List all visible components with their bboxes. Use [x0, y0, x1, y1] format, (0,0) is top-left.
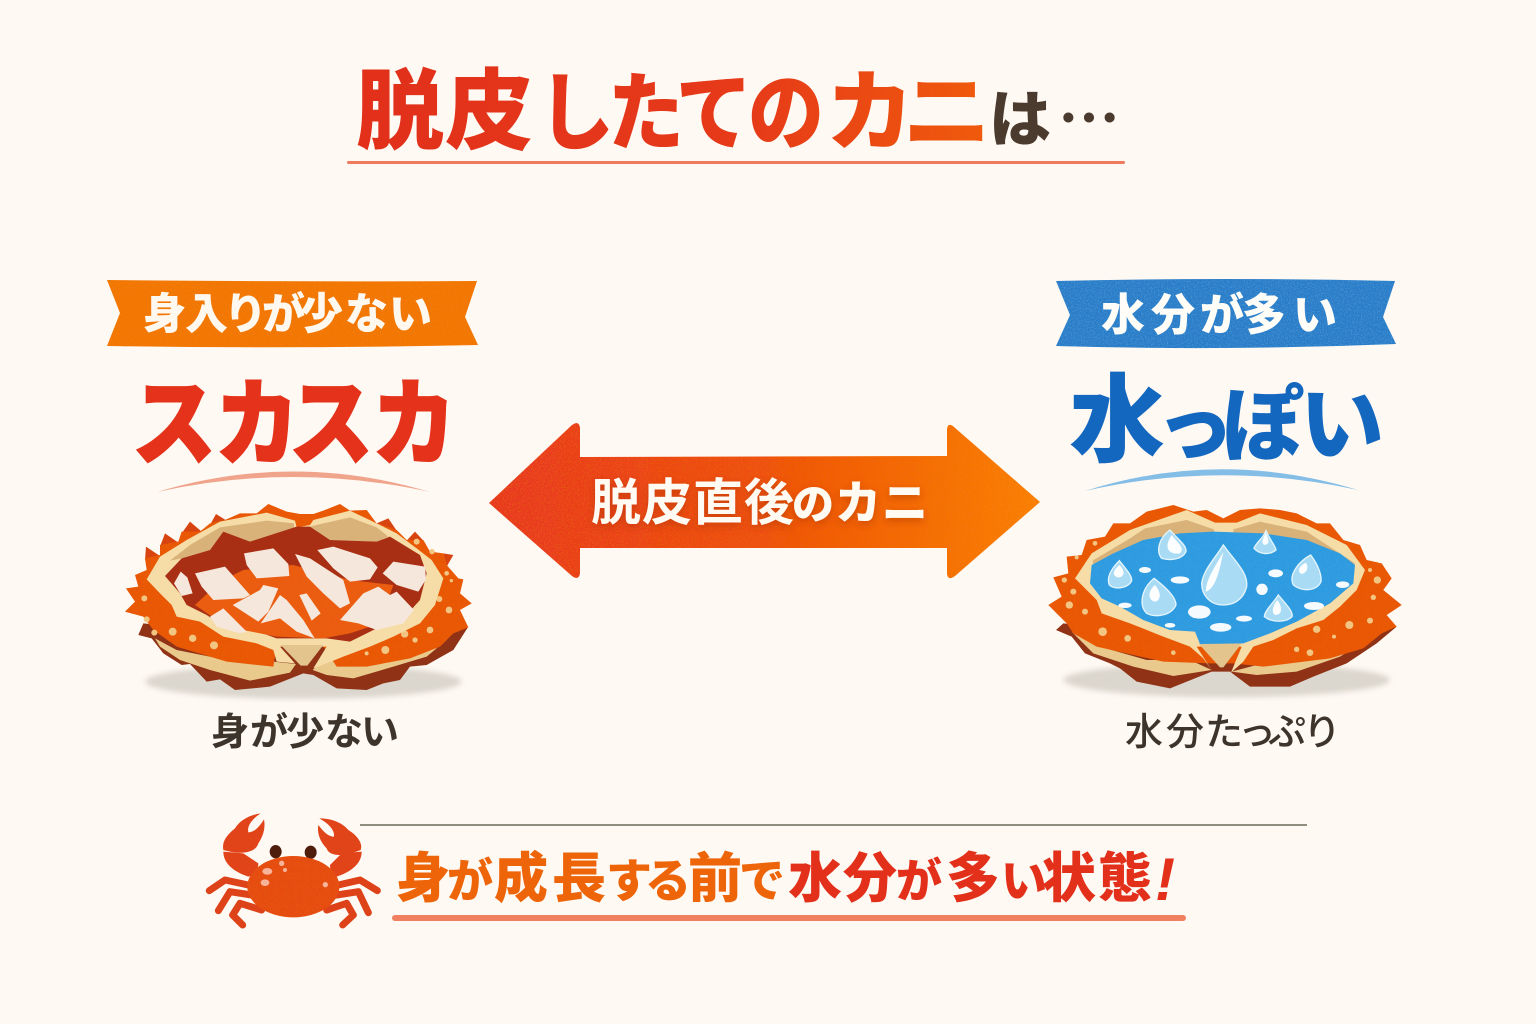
water highlights [1114, 533, 1349, 632]
summary text: で [739, 855, 785, 907]
arrow label: の [792, 481, 834, 528]
arrow label: 脱皮直後 [591, 475, 794, 531]
summary text: が [447, 855, 493, 907]
crab body [247, 856, 339, 917]
shell speckles [1062, 541, 1381, 656]
blue water [1090, 532, 1355, 644]
shell underside [138, 623, 468, 690]
lower cream band [155, 628, 452, 681]
orange shell [1048, 505, 1402, 667]
icon: red crab [209, 813, 377, 925]
tan inner wall [1093, 520, 1355, 567]
ribbon: 水分が多い [1056, 279, 1396, 348]
wedge at shell front [1198, 643, 1242, 667]
cavity [165, 527, 427, 642]
caption: 身が少ない: 身が少ない [211, 712, 399, 754]
shell spikes [145, 514, 453, 567]
title katakana: カニ [826, 63, 991, 162]
shell underside [1056, 623, 1397, 688]
heading: 水っぽい: い [1300, 378, 1384, 472]
wedge at shell front [281, 645, 323, 666]
summary text: い [1001, 855, 1047, 907]
summary text: す [606, 855, 652, 907]
summary text: 態 [1098, 849, 1152, 909]
summary text: 分 [843, 849, 897, 909]
summary text: 前 [688, 849, 742, 909]
heading: 水っぽい: ぽ [1222, 381, 1304, 472]
summary section [209, 813, 1307, 925]
ribbon: 水分が多い: 水分が多い [1101, 290, 1337, 340]
lower cream band [1072, 625, 1377, 676]
title kanji: 脱皮 [356, 62, 533, 161]
cream rim [147, 511, 443, 668]
title underline [347, 161, 1125, 164]
shell shadow [145, 664, 462, 699]
title kana: したての [538, 67, 824, 162]
ribbon: 身入りが少ない [107, 280, 478, 347]
divider line [360, 824, 1307, 826]
arrow label: ニ [882, 477, 928, 529]
illustration: crab shell with sparse meat [125, 504, 472, 699]
arc under heading [157, 472, 430, 492]
summary text: 身 [396, 849, 450, 909]
ribbon: 身入りが少ない: 身入りが少ない [143, 290, 432, 339]
heading: 水っぽい: っ [1156, 383, 1234, 471]
panel: left, little meat [107, 280, 478, 754]
title [347, 62, 1125, 164]
crab eyes [270, 845, 317, 859]
heading: スカスカ: スカスカ [132, 372, 456, 477]
illustration: crab shell with water [1048, 505, 1402, 697]
crab legs [209, 880, 377, 925]
summary text: 水 [788, 849, 842, 909]
summary text: 多 [946, 849, 1000, 909]
caption: 水分たっぷり: 水分たっぷり [1125, 712, 1341, 754]
title trailing text: … [1058, 69, 1120, 159]
cream rim [1075, 510, 1365, 673]
summary text: が [896, 855, 942, 907]
orange shell [125, 504, 472, 667]
shell speckles [141, 539, 453, 656]
shell shadow [1063, 663, 1390, 697]
arrow label: カ [835, 477, 881, 529]
summary text: 成 [494, 848, 548, 909]
orange meat bed [195, 565, 393, 638]
title trailing text: は [989, 86, 1051, 155]
meat chunks [174, 547, 426, 638]
panel: right, watery [1048, 279, 1402, 754]
tan inner wall [170, 517, 388, 561]
arc under heading [1085, 469, 1358, 491]
summary text: 長 [552, 849, 606, 909]
arrow: double-headed [489, 423, 1040, 578]
crab claws [223, 813, 362, 877]
summary underline [392, 915, 1186, 921]
summary text: る [645, 855, 691, 907]
heading: 水っぽい: 水 [1069, 368, 1165, 475]
exclamation mark: ! [1155, 846, 1175, 913]
water drops [1108, 530, 1321, 621]
body highlights [261, 861, 328, 887]
summary text: 状 [1042, 849, 1096, 909]
